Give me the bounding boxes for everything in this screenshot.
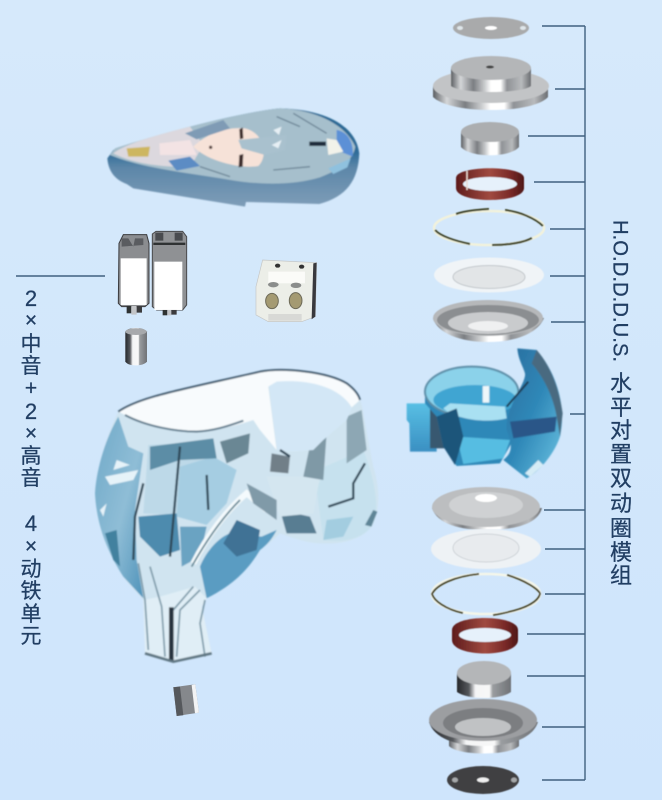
centre chambers xyxy=(143,442,213,517)
part: lower gold ring xyxy=(432,574,540,615)
left lobe xyxy=(95,417,143,598)
label: balanced armature units: 音 xyxy=(20,467,42,490)
part: lower voice coil xyxy=(452,618,518,654)
label: horizontally opposed dual dynamic module: 模 xyxy=(610,540,632,565)
part: lower stepped bowl xyxy=(429,699,538,754)
balanced armature: mid driver right xyxy=(152,231,187,315)
label: balanced armature units: + xyxy=(25,377,37,400)
transparent shell xyxy=(95,370,378,662)
lower lobe xyxy=(200,530,277,598)
label: balanced armature units xyxy=(20,286,42,648)
label: balanced armature units: 单 xyxy=(20,603,42,626)
part: voice coil xyxy=(456,168,524,200)
part: stepped magnet housing xyxy=(433,56,549,110)
label: horizontally opposed dual dynamic module: 平 xyxy=(610,395,632,420)
label: horizontally opposed dual dynamic module: 水 xyxy=(610,371,632,396)
label: balanced armature units: 高 xyxy=(20,445,42,468)
white rim xyxy=(118,370,360,450)
part: lower diaphragm xyxy=(431,529,541,569)
label: balanced armature units: × xyxy=(25,422,37,445)
label: horizontally opposed dual dynamic module: H.O.D.D.D.U.S. xyxy=(608,220,632,362)
balanced armature: mid driver left xyxy=(118,235,149,315)
faceplate with character artwork xyxy=(107,108,359,207)
part: diaphragm xyxy=(434,258,544,292)
label: horizontally opposed dual dynamic module: 动 xyxy=(610,491,632,516)
label: balanced armature units: 元 xyxy=(20,625,42,648)
label: horizontally opposed dual dynamic module: 圈 xyxy=(610,516,632,541)
part: magnet cylinder xyxy=(461,122,519,155)
bottom nozzle tube xyxy=(173,684,199,716)
label: balanced armature units: 音 xyxy=(20,355,42,378)
small metal tube xyxy=(125,328,147,365)
tweeter driver block xyxy=(256,260,317,322)
label: balanced armature units: 2 xyxy=(25,286,37,311)
label: horizontally opposed dual dynamic module: 双 xyxy=(610,466,632,491)
label: balanced armature units: 铁 xyxy=(20,580,42,603)
label: balanced armature units: 2 xyxy=(25,399,37,424)
label: balanced armature units: × xyxy=(25,535,37,558)
label: horizontally opposed dual dynamic module: 组 xyxy=(610,563,632,588)
part: lower metal plate xyxy=(432,487,542,530)
label: horizontally opposed dual dynamic module xyxy=(608,220,632,588)
label: horizontally opposed dual dynamic module: 置 xyxy=(610,442,632,467)
label: balanced armature units: 中 xyxy=(20,333,42,356)
label: balanced armature units: 动 xyxy=(20,558,42,581)
part: blue acoustic chamber xyxy=(407,348,563,478)
part: top cover disc xyxy=(453,17,529,39)
label: balanced armature units: 4 xyxy=(25,511,37,536)
bracket: dual dynamic driver parts leader lines xyxy=(527,26,585,780)
leader line: balanced armature label xyxy=(16,275,105,277)
part: bottom dark disc xyxy=(447,766,519,794)
part: metal bowl xyxy=(433,300,544,342)
part: gold ring xyxy=(434,209,544,245)
sound nozzle xyxy=(143,587,212,662)
label: balanced armature units: × xyxy=(25,309,37,332)
part: lower magnet cylinder xyxy=(457,661,511,698)
label: horizontally opposed dual dynamic module: 对 xyxy=(610,418,632,443)
opening showing background xyxy=(269,381,352,452)
shell body xyxy=(95,370,378,662)
rim shadow lines xyxy=(118,370,360,412)
